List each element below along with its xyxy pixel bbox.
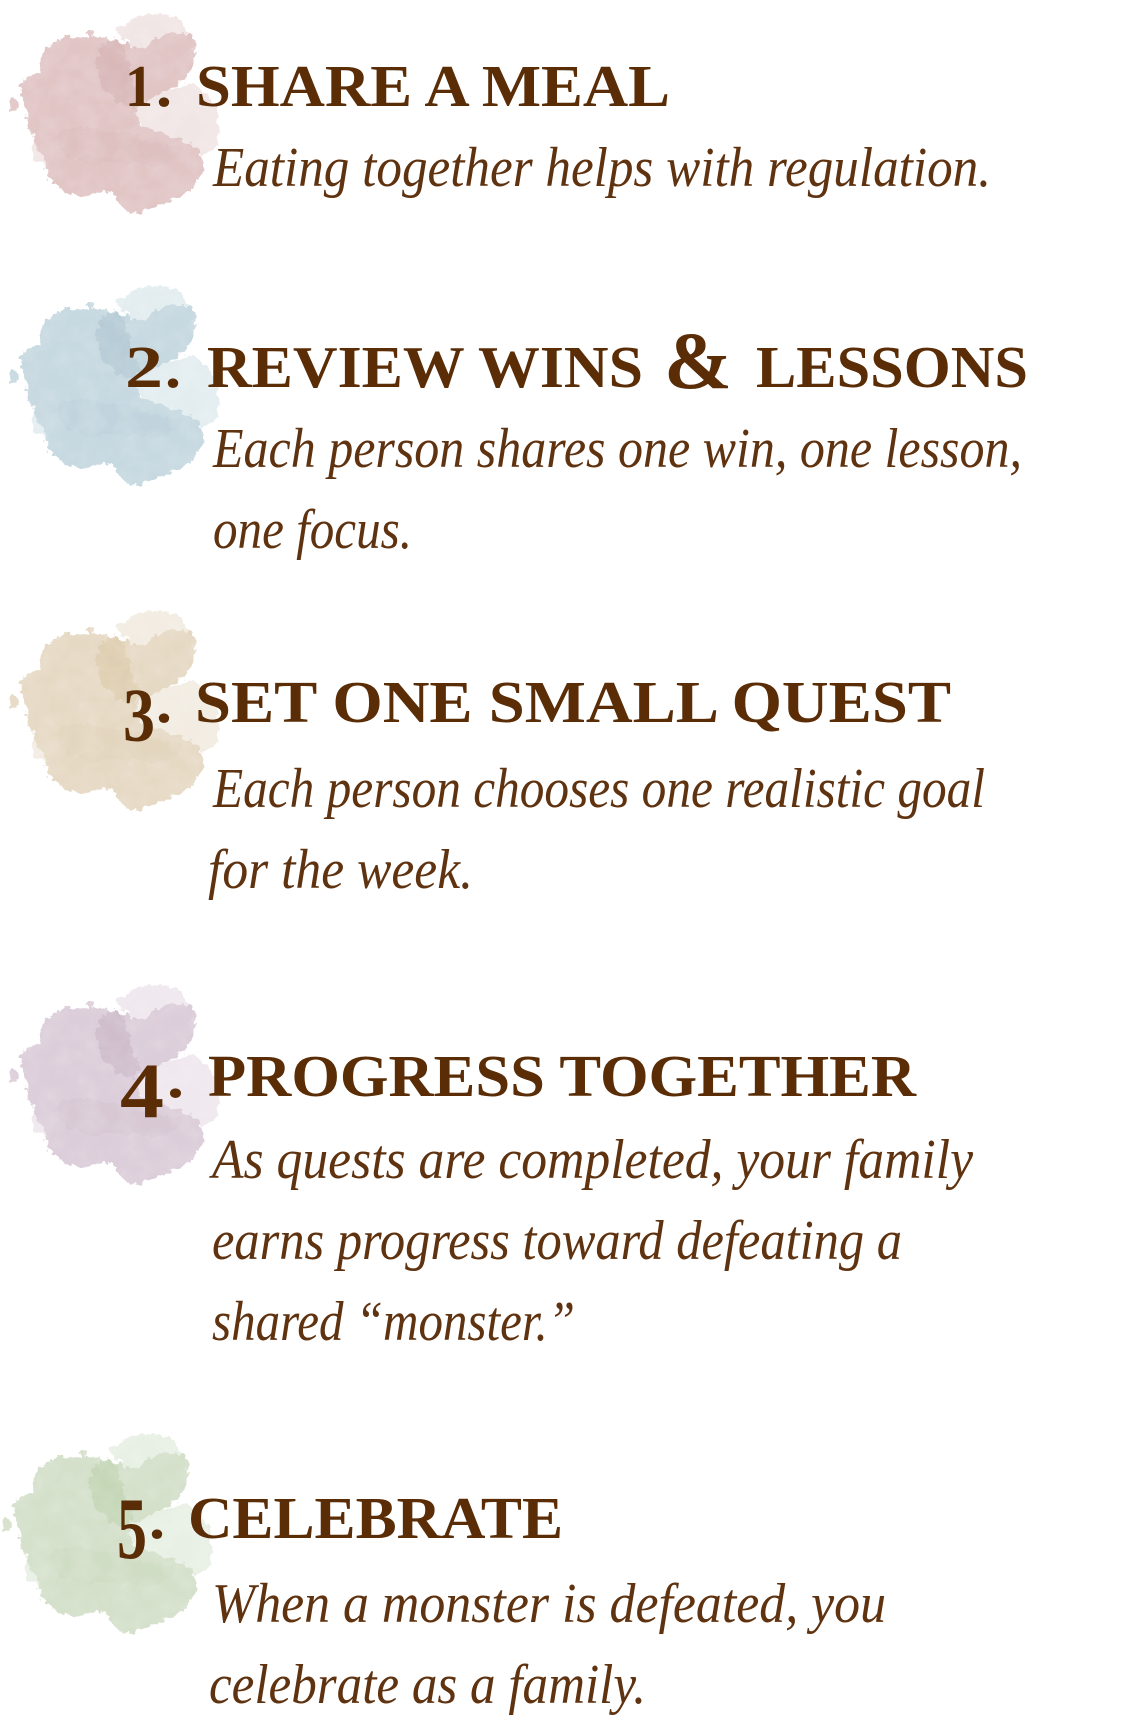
- description: step 5: celebrate as a family.: [209, 1654, 646, 1716]
- heading: 3. set one small quest: .: [156, 669, 172, 735]
- watercolor blob: green: [3, 1434, 212, 1633]
- description: step 2: [212, 418, 1022, 561]
- description: step 4: As quests are completed, your family: [208, 1129, 973, 1191]
- step 5: celebrate: [3, 1434, 886, 1716]
- heading: 4. progress together: [120, 1043, 917, 1134]
- description: step 3: Each person chooses one realistic goal: [212, 758, 985, 820]
- heading: 1. share a meal: 1: [125, 53, 153, 119]
- watercolor blob: blue: [10, 286, 219, 485]
- description: step 5: [209, 1573, 886, 1716]
- description: step 3: [208, 758, 985, 901]
- heading: 3. set one small quest: SET ONE SMALL QUEST: [195, 669, 951, 735]
- heading: 2. review wins and lessons: .: [165, 334, 181, 400]
- heading: 5. celebrate: 5: [117, 1481, 147, 1578]
- heading: 1. share a meal: .: [156, 53, 172, 119]
- description: step 4: [208, 1129, 973, 1353]
- heading: 1. share a meal: SHARE A MEAL: [196, 53, 670, 119]
- heading: 5. celebrate: [117, 1481, 563, 1578]
- watercolor blob: pink: [10, 14, 219, 213]
- heading: 4. progress together: PROGRESS TOGETHER: [208, 1043, 917, 1109]
- watercolor blob: purple: [10, 985, 219, 1184]
- step 4: progress together: [10, 985, 973, 1353]
- heading: 4. progress together: .: [167, 1044, 184, 1110]
- description: step 3: for the week.: [208, 839, 473, 901]
- heading: 2. review wins and lessons: 2: [125, 334, 163, 400]
- heading: 2. review wins and lessons: [125, 315, 1028, 406]
- step 1: share a meal: [10, 14, 991, 213]
- description: step 2: one focus.: [213, 499, 412, 561]
- heading: 2. review wins and lessons: REVIEW WINS: [207, 334, 643, 400]
- description: step 4: earns progress toward defeating a: [212, 1210, 902, 1272]
- heading: 2. review wins and lessons: LESSONS: [756, 334, 1028, 400]
- heading: 5. celebrate: CELEBRATE: [188, 1485, 563, 1551]
- heading: 3. set one small quest: [123, 669, 951, 758]
- heading: 3. set one small quest: 3: [123, 674, 155, 758]
- watercolor blob: tan: [10, 611, 219, 810]
- heading: 5. celebrate: .: [149, 1485, 165, 1551]
- heading: 4. progress together: 4: [120, 1047, 164, 1134]
- heading: 2. review wins and lessons: &: [664, 315, 732, 406]
- description: step 4: shared “monster.”: [212, 1291, 575, 1353]
- description: step 2: Each person shares one win, one lesson,: [212, 418, 1022, 480]
- description: step 5: When a monster is defeated, you: [212, 1573, 886, 1635]
- description: step 1: Eating together helps with regulation.: [212, 137, 991, 199]
- step 3: set one small quest: [10, 611, 985, 901]
- step 2: review wins and lessons: [10, 286, 1028, 561]
